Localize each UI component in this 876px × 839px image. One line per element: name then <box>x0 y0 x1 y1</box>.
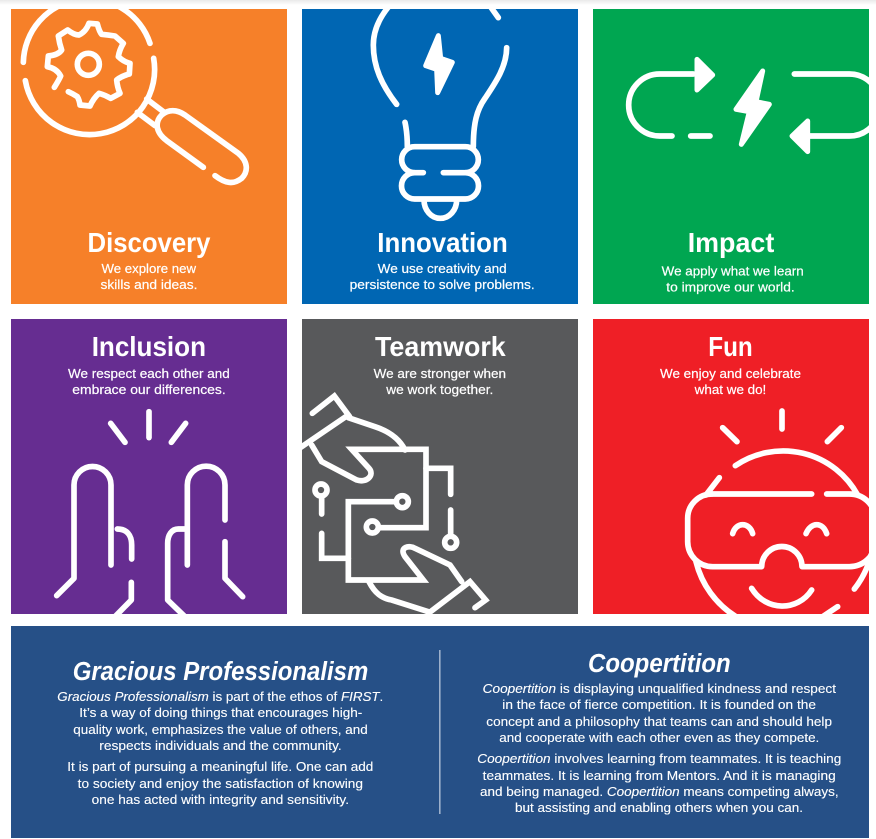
text: Discovery description: We explore new <box>102 261 197 276</box>
text: Coopertition body: concept and a philosophy that teams can and should help <box>486 714 832 729</box>
text: Gracious Professionalism body: one has acted with integrity and sensitivity. <box>92 792 349 807</box>
text: Inclusion description: We respect each other and <box>68 366 230 381</box>
text: Discovery description <box>100 261 198 292</box>
text: Discovery description: skills and ideas. <box>100 277 198 292</box>
text: Innovation description <box>350 261 535 292</box>
text: Innovation description: persistence to solve problems. <box>350 277 535 292</box>
icon: high five hands <box>57 412 243 618</box>
text: Gracious Professionalism body <box>57 689 383 807</box>
icon: arrows and lightning bolt <box>629 59 876 152</box>
text: Impact description: to improve our world. <box>666 280 795 294</box>
text: Coopertition body: and being managed. Coopertition means competing always, <box>480 784 839 799</box>
heading: Teamwork: Teamwork <box>375 331 506 362</box>
text: Gracious Professionalism body: It’s a way of doing things that encourages high- <box>79 705 362 720</box>
text: Impact description: We apply what we learn <box>662 264 804 278</box>
panel: Inclusion <box>11 319 287 618</box>
text: Coopertition body: but assisting and enabling others when you can. <box>515 800 803 815</box>
panel: Teamwork <box>298 319 578 614</box>
heading: Innovation: Innovation <box>377 227 508 258</box>
text: Coopertition body: teammates. It is learning from Mentors. And it is managing <box>483 768 836 783</box>
heading: Fun: Fun <box>708 331 753 362</box>
panel: Fun <box>593 319 875 617</box>
panel: Innovation <box>302 5 578 304</box>
text: Coopertition body: in the face of fierce competition. It is founded on the <box>502 697 816 712</box>
text: Inclusion description <box>68 366 230 397</box>
panel: Discovery <box>11 0 287 304</box>
heading: Impact: Impact <box>688 227 774 258</box>
heading: Discovery: Discovery <box>88 227 211 258</box>
text: Impact description <box>662 264 804 294</box>
icon: smiling face with VR goggles <box>688 411 875 617</box>
text: Coopertition body: Coopertition involves learning from teammates. It is teaching <box>477 751 841 766</box>
heading: Coopertition: Coopertition <box>588 650 731 678</box>
panel: Gracious Professionalism and Coopertition <box>11 626 869 838</box>
text: Inclusion description: embrace our differences. <box>72 382 226 397</box>
text: Gracious Professionalism body: Gracious Professionalism is part of the ethos of FIRST. <box>57 689 383 704</box>
text: Teamwork description: We are stronger when <box>374 366 506 381</box>
icon: hands holding circuit <box>298 396 486 613</box>
icon: magnifying glass with gear <box>23 0 246 182</box>
text: Coopertition body: Coopertition is displaying unqualified kindness and respect <box>483 681 836 696</box>
heading: Gracious Professionalism: Gracious Professionalism <box>73 658 368 686</box>
text: Teamwork description: we work together. <box>385 382 493 397</box>
text: Coopertition body <box>477 681 841 815</box>
heading: Inclusion: Inclusion <box>92 331 206 362</box>
text: Gracious Professionalism body: to society and enjoy the satisfaction of knowing <box>78 776 363 791</box>
text: Coopertition body: and cooperate with each other even as they compete. <box>499 730 819 745</box>
text: Gracious Professionalism body: quality work, emphasizes the value of others, and <box>73 722 368 737</box>
panel: Impact <box>593 9 876 304</box>
text: Gracious Professionalism body: It is part of pursuing a meaningful life. One can add <box>67 759 373 774</box>
text: Innovation description: We use creativity and <box>378 261 507 276</box>
text: Teamwork description <box>374 366 506 397</box>
text: Gracious Professionalism body: respects individuals and the community. <box>99 738 342 753</box>
icon: light bulb <box>373 5 507 218</box>
text: Fun description: what we do! <box>694 382 766 397</box>
text: Fun description <box>660 366 801 397</box>
text: Fun description: We enjoy and celebrate <box>660 366 801 381</box>
